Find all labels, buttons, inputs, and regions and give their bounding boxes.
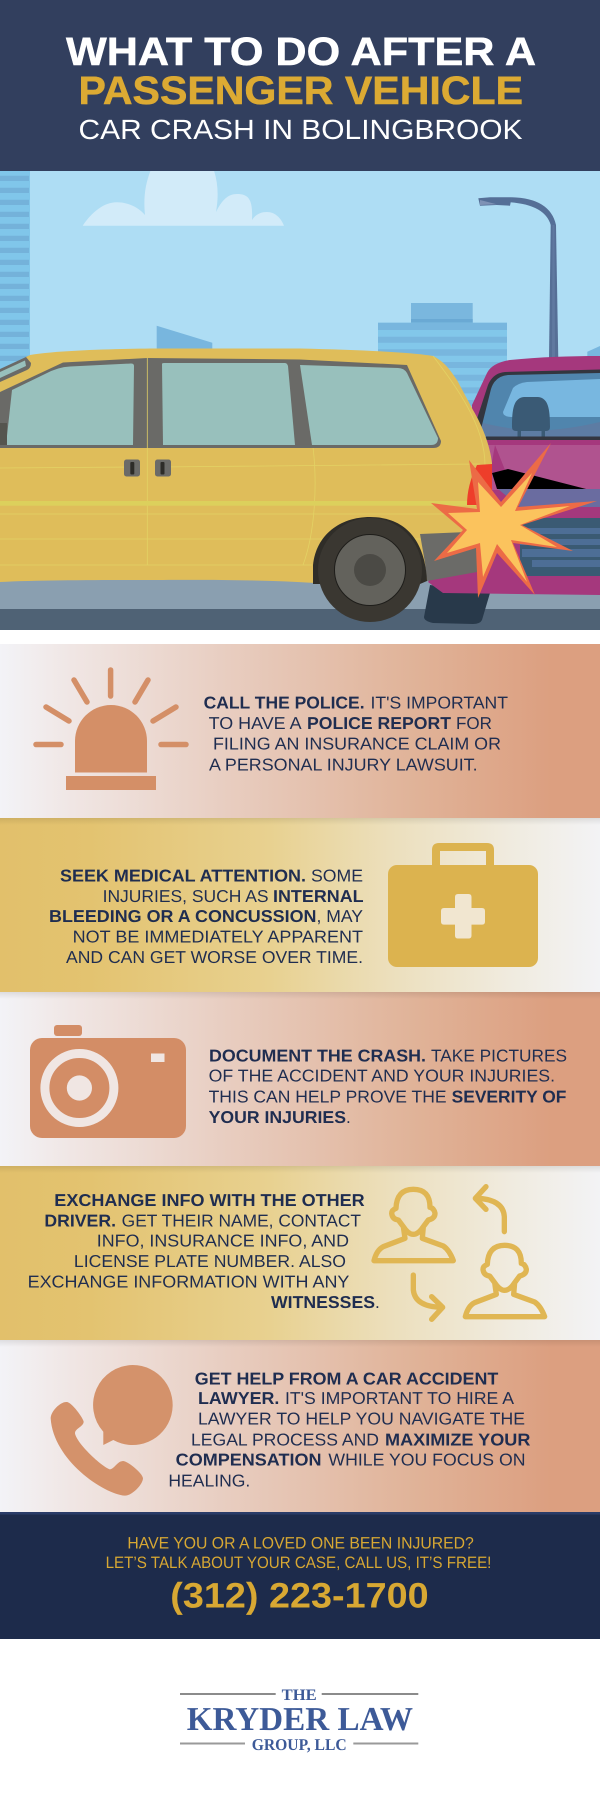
- icon: first aid kit: [388, 843, 538, 967]
- text: call the police: POLICE REPORT: [307, 713, 452, 733]
- text: seek medical attention: INTERNAL: [273, 886, 364, 906]
- cloud: [83, 165, 284, 226]
- text: exchange info: EXCHANGE INFORMATION WITH ANY: [28, 1271, 350, 1291]
- call to action line 1: HAVE YOU OR A LOVED ONE BEEN INJURED?: [127, 1535, 474, 1553]
- panel: exchange info: [0, 1166, 600, 1340]
- text: document the crash: TAKE PICTURES: [431, 1046, 567, 1066]
- text: document the crash: OF THE ACCIDENT AND YOUR INJURIES.: [209, 1066, 555, 1086]
- text: exchange info: INFO, INSURANCE INFO, AND: [97, 1230, 349, 1250]
- icon: speech bubble: [93, 1365, 173, 1445]
- text: seek medical attention: AND CAN GET WORSE OVER TIME.: [66, 947, 363, 967]
- text: get help: IT'S IMPORTANT TO HIRE A: [285, 1388, 515, 1408]
- title line 3: CAR CRASH IN BOLINGBROOK: [78, 114, 523, 145]
- logo word: the: THE: [282, 1687, 317, 1704]
- panel: document the crash: [0, 992, 600, 1166]
- door lines: [0, 356, 485, 565]
- text: get help: [168, 1369, 531, 1490]
- text: get help: LEGAL PROCESS AND: [191, 1429, 379, 1449]
- text: exchange info: LICENSE PLATE NUMBER. ALSO: [74, 1251, 346, 1271]
- door handles: [124, 460, 171, 476]
- shadow: [0, 818, 600, 825]
- text: get help: LAWYER.: [198, 1388, 279, 1408]
- panel: get help from a lawyer: [0, 1340, 600, 1512]
- text: get help: GET HELP FROM A CAR ACCIDENT: [195, 1369, 499, 1389]
- wheel arch: [313, 517, 427, 584]
- magenta car: [428, 356, 600, 595]
- triangular building: [156, 326, 212, 348]
- phone number: (312) 223-1700: [170, 1576, 429, 1616]
- yellow stripe: [0, 501, 478, 506]
- text: call the police: FOR: [456, 713, 492, 733]
- logo: The Kryder Law Group: [180, 1687, 418, 1754]
- text: call the police: [204, 692, 509, 774]
- text: document the crash: THIS CAN HELP PROVE THE: [209, 1087, 447, 1107]
- shadow: [0, 1340, 600, 1347]
- text: exchange info: .: [375, 1292, 380, 1312]
- text: document the crash: SEVERITY OF: [452, 1087, 566, 1107]
- text: exchange info: DRIVER.: [44, 1210, 116, 1230]
- text: get help: LAWYER TO HELP YOU NAVIGATE THE: [198, 1408, 525, 1428]
- text: exchange info: WITNESSES: [271, 1292, 375, 1312]
- text: exchange info: [28, 1190, 380, 1312]
- panel: call the police: [0, 644, 600, 818]
- icon: two people exchanging info: [374, 1187, 545, 1319]
- text: call the police: CALL THE POLICE.: [204, 692, 365, 712]
- title line 1: WHAT TO DO AFTER A: [66, 30, 536, 74]
- tail light: [467, 464, 492, 505]
- text: seek medical attention: SEEK MEDICAL ATTENTION.: [60, 866, 306, 886]
- panel: header: [0, 0, 600, 171]
- text: seek medical attention: , MAY: [316, 906, 364, 926]
- text: call the police: IT'S IMPORTANT: [370, 692, 509, 712]
- text: seek medical attention: [49, 866, 364, 967]
- panel: call to action: [0, 1512, 600, 1639]
- side window 3: [300, 365, 438, 445]
- icon: siren: [36, 670, 186, 790]
- illustration: car crash scene: [0, 165, 600, 630]
- street lamp: [478, 197, 558, 360]
- text: document the crash: .: [346, 1107, 351, 1127]
- magenta car wheel: [424, 585, 490, 624]
- text: document the crash: DOCUMENT THE CRASH.: [209, 1046, 426, 1066]
- shadow: [0, 992, 600, 999]
- road: [0, 575, 600, 630]
- text: exchange info: GET THEIR NAME, CONTACT: [122, 1210, 362, 1230]
- door line over frame: [146, 358, 148, 448]
- text: document the crash: [209, 1046, 567, 1127]
- text: get help: HEALING.: [168, 1470, 250, 1490]
- text: exchange info: EXCHANGE INFO WITH THE OTHER: [54, 1190, 365, 1210]
- right building: [378, 303, 600, 408]
- icon: camera: [30, 1025, 186, 1138]
- panel: seek medical attention: [0, 818, 600, 992]
- rear bumper: [420, 532, 495, 581]
- logo word: kryder law: KRYDER LAW: [187, 1701, 413, 1738]
- side window 2: [162, 363, 295, 445]
- text: document the crash: YOUR INJURIES: [209, 1107, 346, 1127]
- title line 2: PASSENGER VEHICLE: [78, 69, 523, 113]
- mirror strip: [0, 357, 31, 382]
- logo word: group llc: GROUP, LLC: [252, 1735, 347, 1754]
- yellow car: [0, 348, 495, 622]
- window frame: [0, 358, 441, 448]
- left building: [0, 171, 30, 371]
- text: seek medical attention: SOME: [311, 866, 363, 886]
- text: get help: COMPENSATION: [176, 1449, 322, 1469]
- headrest: [512, 397, 550, 437]
- text: call the police: FILING AN INSURANCE CLAIM OR: [213, 734, 501, 754]
- icon: phone: [51, 1402, 143, 1496]
- call to action line 2: LET’S TALK ABOUT YOUR CASE, CALL US, IT’S FREE!: [106, 1554, 491, 1572]
- text: seek medical attention: BLEEDING OR A CONCUSSION: [49, 906, 316, 926]
- front seat block: [0, 423, 7, 445]
- text: call the police: A PERSONAL INJURY LAWSUIT.: [209, 754, 478, 774]
- text: call the police: TO HAVE A: [209, 713, 302, 733]
- side window 1: [6, 364, 134, 445]
- text: seek medical attention: NOT BE IMMEDIATELY APPARENT: [73, 927, 364, 947]
- explosion: [431, 443, 597, 598]
- text: seek medical attention: INJURIES, SUCH AS: [103, 886, 269, 906]
- shadow: [0, 1166, 600, 1173]
- text: get help: MAXIMIZE YOUR: [385, 1429, 531, 1449]
- wheel: [318, 518, 422, 622]
- text: get help: WHILE YOU FOCUS ON: [328, 1449, 526, 1469]
